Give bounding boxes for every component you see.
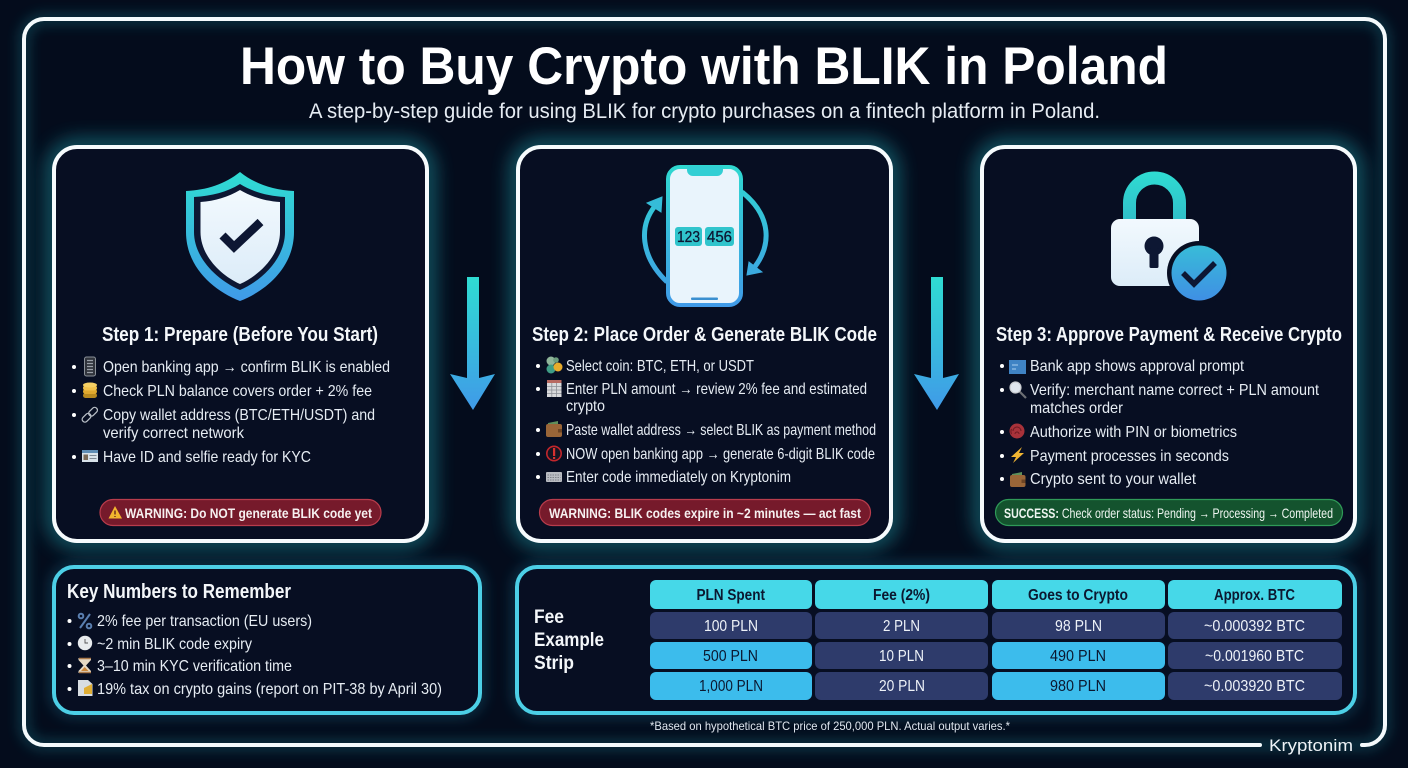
step 1 bullet list: Open banking app → confirm BLIK is enabled: [103, 359, 390, 376]
icon: hourglass: [78, 658, 91, 673]
icon: mobile phone: [84, 357, 96, 376]
step 3 bullet list: Bank app shows approval prompt: [1030, 358, 1244, 375]
arrow: step 2 to step 3: [914, 277, 959, 410]
icon: magnifier: [1010, 382, 1026, 398]
step 2 bullet list: Select coin: BTC, ETH, or USDT: [566, 358, 754, 375]
fee strip background: [517, 567, 1355, 713]
table row 1,000 PLN: 20 PLN: [879, 678, 925, 695]
warning pill: step 2: [540, 500, 870, 526]
fee strip label: Example: [534, 630, 604, 651]
step 1 bullet list: [72, 357, 390, 466]
icon: clock: [78, 636, 92, 650]
table header row: Approx. BTC: [1214, 587, 1295, 604]
icon: fingerprint: [1010, 424, 1024, 438]
icon: tax document: [78, 680, 92, 696]
fee strip label: Fee: [534, 607, 564, 628]
step 3 bullet list: [1000, 358, 1319, 488]
key numbers list: [68, 613, 442, 698]
step 3 bullet list: matches order: [1030, 400, 1124, 417]
warning pill: step 1: [100, 500, 381, 526]
icon: phone with code: 123: [677, 229, 700, 246]
title: How to Buy Crypto with BLIK in Poland: [240, 37, 1168, 96]
table row 1,000 PLN: 1,000 PLN: [699, 678, 763, 695]
step 2 heading: Step 2: Place Order & Generate BLIK Code: [532, 324, 877, 346]
step 1 heading: Step 1: Prepare (Before You Start): [102, 324, 378, 346]
panel: step 3 approve payment: [982, 147, 1355, 541]
icon: percent: [79, 614, 91, 628]
table header row: PLN Spent: [696, 587, 765, 604]
icon: keyboard: [546, 472, 562, 482]
step 2 bullet list: Enter code immediately on Kryptonim: [566, 469, 791, 486]
panel: step 2 place order: [518, 147, 891, 541]
icon: exclamation circle: [547, 446, 561, 461]
table row 500 PLN: 500 PLN: [703, 648, 758, 665]
panel: step 1 prepare: [54, 147, 427, 541]
warning pill: step 2: WARNING: BLIK codes expire in ~2 minutes — act fast: [549, 505, 861, 521]
icon: bank card: [1009, 360, 1026, 374]
table row 1,000 PLN: [650, 672, 1342, 700]
step 1 bullet list: Check PLN balance covers order + 2% fee: [103, 383, 372, 400]
icon: link: [81, 406, 99, 423]
icon: lightning: [1011, 447, 1024, 463]
step 1 bullet list: Have ID and selfie ready for KYC: [103, 449, 311, 466]
key numbers list: 3–10 min KYC verification time: [97, 658, 292, 675]
brand name: Kryptonim: [1269, 736, 1353, 755]
icon: wallet: [546, 421, 562, 437]
icon: phone with code: [645, 166, 766, 305]
step 1 bullet list: Copy wallet address (BTC/ETH/USDT) and: [103, 407, 375, 424]
icon: warning triangle: [108, 506, 122, 518]
key numbers list: 2% fee per transaction (EU users): [97, 613, 312, 630]
step 3 bullet list: Authorize with PIN or biometrics: [1030, 424, 1237, 441]
step 3 bullet list: Payment processes in seconds: [1030, 448, 1229, 465]
fee strip label: [534, 607, 604, 674]
step 2 bullet list: Paste wallet address → select BLIK as payment method: [566, 422, 876, 439]
arrow: step 1 to step 2: [450, 277, 495, 410]
table row 100 PLN: [650, 612, 1342, 639]
icon: coins: [83, 382, 97, 398]
rotation arrows: [645, 192, 766, 282]
step 2 bullet list: crypto: [566, 398, 605, 415]
footnote: *Based on hypothetical BTC price of 250,000 PLN. Actual output varies.*: [650, 719, 1010, 733]
step 2 bullet list: [536, 356, 876, 486]
step 1 bullet list: verify correct network: [103, 425, 245, 442]
table header row: Goes to Crypto: [1028, 587, 1128, 604]
step 3 heading: Step 3: Approve Payment & Receive Crypto: [996, 324, 1342, 346]
table row 100 PLN: ~0.000392 BTC: [1204, 618, 1305, 635]
step 3 bullet list: Verify: merchant name correct + PLN amount: [1030, 382, 1319, 399]
icon: wallet: [1010, 472, 1026, 487]
card 3 background: [982, 147, 1355, 541]
card 2 background: [518, 147, 891, 541]
success pill: step 3: SUCCESS: Check order status: Pending → Processing → Completed: [1004, 505, 1333, 521]
warning pill: step 1: WARNING: Do NOT generate BLIK code yet: [125, 505, 372, 521]
icon: padlock with check badge: [1111, 178, 1231, 305]
subtitle: A step-by-step guide for using BLIK for crypto purchases on a fintech platform in Poland.: [309, 100, 1100, 123]
icon: money and coins: [546, 356, 562, 374]
table row 500 PLN: 490 PLN: [1050, 648, 1106, 665]
icon: phone with code: 456: [707, 229, 732, 246]
key numbers list: 19% tax on crypto gains (report on PIT-38 by April 30): [97, 681, 442, 698]
panel: fee example strip: [517, 567, 1355, 713]
table header row: [650, 580, 1342, 609]
table row 100 PLN: 100 PLN: [704, 618, 758, 635]
icon: calculator: [547, 380, 562, 397]
table row 500 PLN: [650, 642, 1342, 669]
key numbers list: ~2 min BLIK code expiry: [97, 636, 252, 653]
card 1 background: [54, 147, 427, 541]
key numbers heading: Key Numbers to Remember: [67, 581, 291, 603]
panel: key numbers: [54, 567, 480, 713]
step 2 bullet list: NOW open banking app → generate 6-digit BLIK code: [566, 446, 875, 463]
icon: shield with check: [186, 172, 294, 301]
table row 100 PLN: 98 PLN: [1055, 618, 1102, 635]
fee table: [650, 580, 1342, 700]
table row 500 PLN: 10 PLN: [879, 648, 924, 665]
table row 1,000 PLN: 980 PLN: [1050, 678, 1106, 695]
fee strip label: Strip: [534, 653, 574, 674]
success pill: step 3: [996, 500, 1342, 526]
key numbers background: [54, 567, 480, 713]
table header row: Fee (2%): [873, 587, 930, 604]
table row 100 PLN: 2 PLN: [883, 618, 920, 635]
step 3 bullet list: Crypto sent to your wallet: [1030, 471, 1197, 488]
icon: ID card: [82, 450, 98, 462]
step 2 bullet list: Enter PLN amount → review 2% fee and estimated: [566, 381, 867, 398]
table row 500 PLN: ~0.001960 BTC: [1205, 648, 1304, 665]
table row 1,000 PLN: ~0.003920 BTC: [1204, 678, 1305, 695]
